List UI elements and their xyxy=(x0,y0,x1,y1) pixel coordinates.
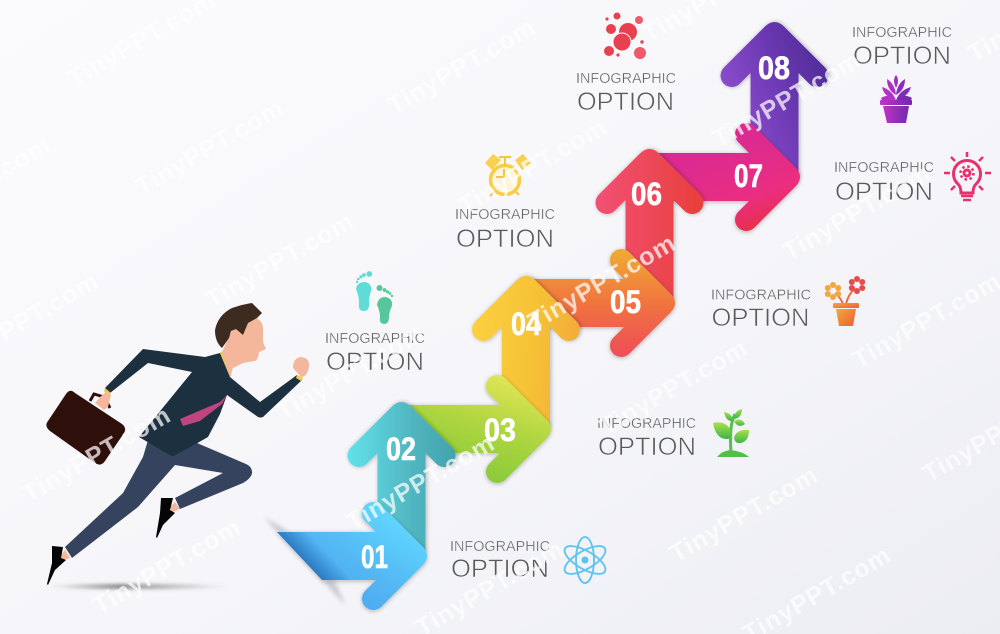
front shoe xyxy=(156,498,180,538)
label: option 02 xyxy=(325,330,425,376)
icon: atom xyxy=(561,537,609,583)
label: option 03 xyxy=(597,415,696,461)
arrow 05 xyxy=(525,249,675,357)
label: option 06: INFOGRAPHIC xyxy=(576,70,676,87)
label: option 01: OPTION xyxy=(451,555,549,583)
tie xyxy=(180,395,227,426)
label: option 05: OPTION xyxy=(712,304,810,332)
label: option 01: INFOGRAPHIC xyxy=(450,538,550,555)
watermark: TinyPPT.com xyxy=(201,207,359,314)
trousers xyxy=(65,440,252,558)
watermark: TinyPPT.com xyxy=(708,46,866,153)
left hand xyxy=(95,388,111,410)
arrow 06: 06 xyxy=(631,176,662,212)
arrow 02: 02 xyxy=(386,431,416,467)
arrow 04 xyxy=(472,276,580,427)
back shoe xyxy=(47,546,70,585)
label: option 04 xyxy=(455,206,555,253)
label: option 04: INFOGRAPHIC xyxy=(455,206,555,223)
arrow 01 xyxy=(277,502,427,610)
ground shadow xyxy=(46,584,230,589)
arrow 08 xyxy=(720,22,829,178)
watermark: TinyPPT.com xyxy=(342,429,500,536)
icon: succulent xyxy=(880,75,912,123)
arrow 04: 04 xyxy=(511,306,541,342)
arrow 08: 08 xyxy=(758,50,790,86)
right hand xyxy=(293,357,309,381)
arrow 03: 03 xyxy=(484,412,516,448)
icon: sprout xyxy=(713,409,749,457)
watermark: TinyPPT.com xyxy=(272,319,430,426)
label: option 02: INFOGRAPHIC xyxy=(325,330,425,347)
label: option 07: OPTION xyxy=(835,178,933,206)
collar xyxy=(220,351,232,377)
hair xyxy=(215,303,262,348)
label: option 03: OPTION xyxy=(598,433,696,461)
watermark: TinyPPT.com xyxy=(665,461,823,568)
label: option 04: OPTION xyxy=(456,225,554,253)
icon: footprints xyxy=(356,271,393,324)
arrow 05: 05 xyxy=(610,284,641,320)
face xyxy=(222,317,266,377)
label: option 08: OPTION xyxy=(853,42,951,70)
arrow 07: 07 xyxy=(734,158,763,194)
icon: flower pot xyxy=(825,276,865,326)
watermark: TinyPPT.com xyxy=(595,334,753,441)
label: option 03: INFOGRAPHIC xyxy=(597,415,696,432)
label: option 08: INFOGRAPHIC xyxy=(852,24,952,41)
label: option 06 xyxy=(576,70,676,116)
arrow 01: 01 xyxy=(361,539,388,575)
icon: alarm clock xyxy=(485,154,531,196)
label: option 05: INFOGRAPHIC xyxy=(711,286,811,304)
label: option 07: INFOGRAPHIC xyxy=(834,159,934,176)
watermark: TinyPPT.com xyxy=(131,94,289,201)
arrow 06 xyxy=(595,149,704,300)
label: option 08 xyxy=(852,24,952,70)
businessman running xyxy=(46,303,309,585)
arrow 03 xyxy=(402,375,551,483)
watermark: TinyPPT.com xyxy=(383,13,541,120)
briefcase xyxy=(46,391,125,465)
watermark: TinyPPT.com xyxy=(18,401,176,508)
label: option 01 xyxy=(450,538,550,583)
icon: bulb xyxy=(944,152,991,200)
arrow 02 xyxy=(347,402,456,553)
jacket xyxy=(105,349,302,457)
watermark: TinyPPT.com xyxy=(88,513,246,620)
icon: bubbles xyxy=(604,12,646,59)
watermark: TinyPPT.com xyxy=(454,113,612,220)
label: option 05 xyxy=(711,286,811,332)
watermark: TinyPPT.com xyxy=(778,159,936,266)
label: option 06: OPTION xyxy=(577,88,674,116)
label: option 07 xyxy=(834,159,934,206)
fold shadow behind first arrow xyxy=(264,517,346,606)
watermark: TinyPPT.com xyxy=(523,229,681,336)
label: option 02: OPTION xyxy=(326,348,424,376)
arrow 07 xyxy=(648,123,800,231)
